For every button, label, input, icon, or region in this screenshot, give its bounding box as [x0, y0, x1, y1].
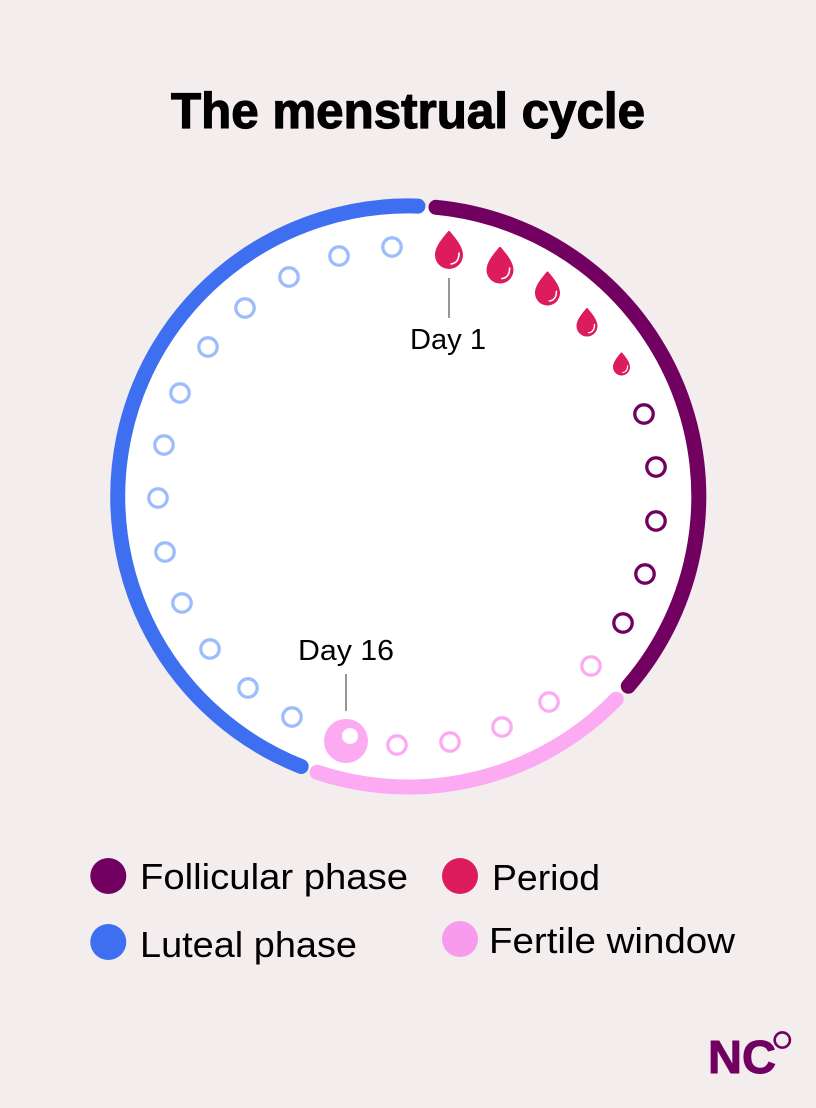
period day markers [435, 231, 630, 376]
arc: fertile window [317, 699, 616, 787]
luteal day markers [149, 238, 401, 726]
legend: period: Period [492, 857, 600, 898]
legend: luteal phase: Luteal phase [140, 924, 357, 965]
legend: period [442, 857, 600, 898]
icon: ovulation egg [324, 719, 368, 763]
cycle diagram [118, 206, 699, 787]
drop day 1 [435, 231, 463, 269]
arc: luteal phase [118, 206, 418, 767]
callout: day 16: Day 16 [298, 635, 394, 667]
arc: follicular phase [436, 207, 699, 686]
drop day 5 [613, 352, 630, 376]
inner white disc [118, 206, 698, 787]
logo: NC: NC [708, 1031, 776, 1083]
legend: follicular phase: Follicular phase [140, 856, 408, 897]
callout: day 1: Day 1 [410, 324, 486, 356]
drop day 4 [576, 308, 598, 336]
fertile day markers [388, 657, 600, 754]
drop day 3 [535, 272, 560, 306]
drop day 2 [486, 247, 514, 284]
title: The menstrual cycle [171, 83, 645, 139]
legend [90, 856, 736, 965]
callout: day 1 [410, 278, 486, 356]
follicular day markers [614, 405, 665, 632]
legend: fertile window: Fertile window [489, 920, 736, 961]
callout: day 16 [298, 635, 394, 711]
